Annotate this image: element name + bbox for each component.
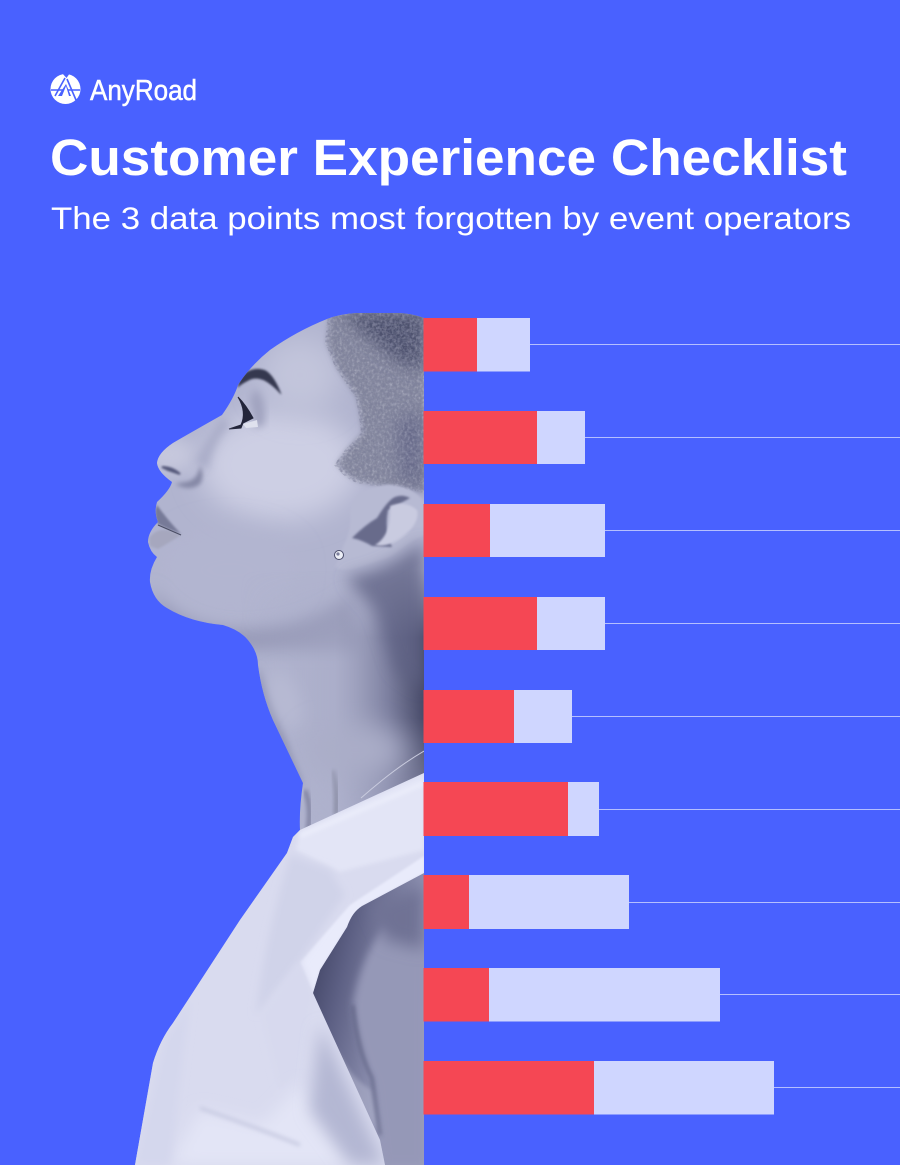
logo: AnyRoad [50,73,197,107]
bar 1 [424,318,530,372]
subtitle: The 3 data points most forgotten by event operators [51,200,851,236]
bar 6 [424,782,599,836]
ear [352,484,420,548]
connector lines [530,344,900,1088]
photo: woman in profile [130,305,430,1165]
bar 5 [424,690,572,743]
hair [322,308,426,496]
bar 2 [424,411,585,464]
icon: AnyRoad mark [50,73,80,104]
earring [334,550,344,560]
skin: face and neck [130,305,430,1165]
logo wordmark: AnyRoad [90,75,197,107]
lips [149,505,181,549]
arm [313,873,424,1165]
shirt [130,770,425,1165]
nose shadow [162,418,230,488]
bar 9 [424,1061,774,1114]
bar 8 [424,968,720,1022]
bar 3 [424,504,605,557]
necklace [361,751,424,798]
title: Customer Experience Checklist [50,129,847,186]
eye socket [250,388,265,428]
bar chart [424,318,900,1114]
shadow under ear [345,540,424,690]
eye [229,397,258,429]
bar 4 [424,597,605,650]
eyebrow [238,369,281,394]
bar 7 [424,875,629,929]
